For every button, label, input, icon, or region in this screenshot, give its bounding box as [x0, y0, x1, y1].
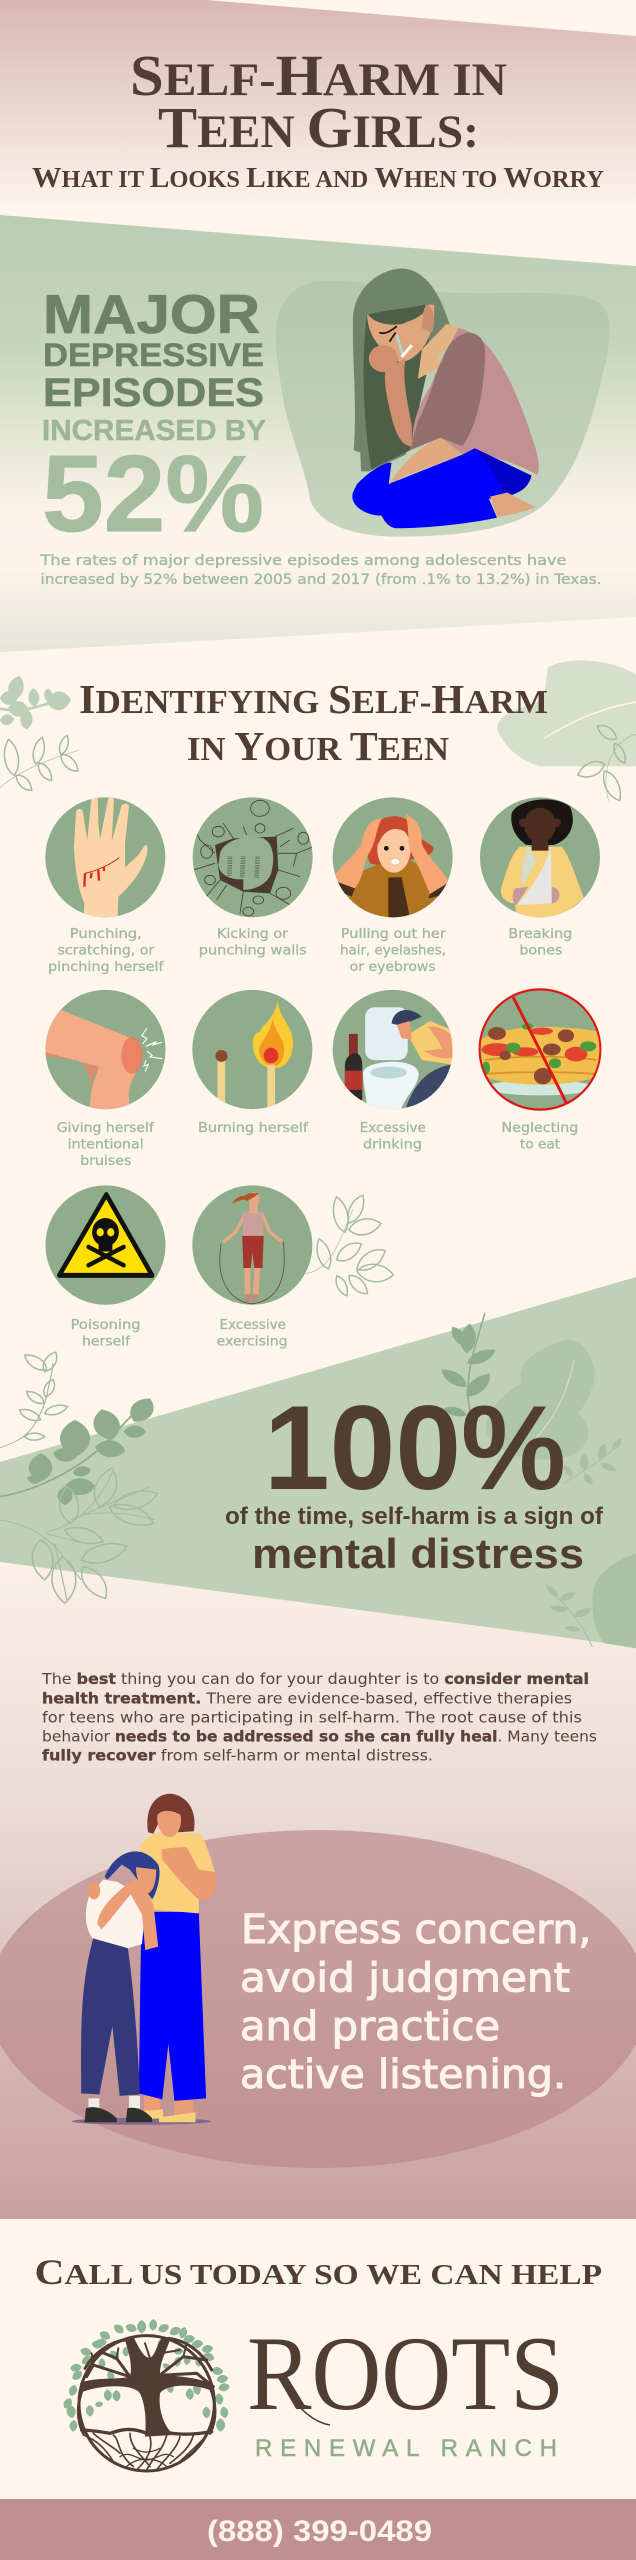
statistic headline: INCREASED BY: [42, 415, 266, 447]
labels: icon captions: Pulling out her: [341, 927, 447, 942]
leaves: around 100% band: [0, 1313, 636, 1648]
icon: bruised knee: [41, 990, 166, 1113]
heading: identifying self-harm: [79, 676, 548, 769]
footer: phone number: [0, 2499, 636, 2560]
labels: icon captions: herself: [82, 1334, 130, 1350]
paragraph: treatment advice: fully recover from self-harm or mental distress.: [42, 1747, 433, 1765]
labels: icon captions: or eyebrows: [350, 960, 436, 975]
statistic: 100% mental distress: [225, 1381, 604, 1577]
illustration: mother comforting daughter: [72, 1794, 216, 2125]
labels: icon captions: scratching, or: [58, 944, 155, 958]
labels: icon captions: Poisoning: [71, 1318, 141, 1333]
paragraph: treatment advice: The best thing you can do for your daughter is to consider mental: [41, 1670, 589, 1688]
labels: icon captions: punching walls: [199, 944, 307, 958]
statistic headline: DEPRESSIVE: [43, 337, 264, 373]
statistic headline: MAJOR: [43, 283, 260, 345]
icon: broken arm sling: [480, 797, 600, 920]
title: TEEN GIRLS:: [158, 95, 479, 160]
labels: icon captions: to eat: [520, 1138, 560, 1152]
pink gradient top band: [0, 0, 636, 212]
icon grid: signs of self-harm: [41, 796, 601, 1305]
labels: icon captions: bones: [519, 944, 563, 958]
icon: excessive drinking: [333, 990, 456, 1113]
statistic: 100% mental distress: 100%: [264, 1381, 566, 1515]
paragraph: treatment advice: health treatment. There are evidence-based, effective therapies: [42, 1689, 572, 1707]
leaves: around identifying heading: [0, 660, 636, 1298]
panel: major depressive episodes: [0, 215, 636, 652]
statistic headline: 52%: [42, 433, 264, 555]
statistic: 100% mental distress: of the time, self-harm is a sign of: [225, 1503, 604, 1530]
labels: icon captions: exercising: [217, 1334, 288, 1350]
ellipse panel: express concern: [0, 1794, 636, 2168]
statistic headline: [42, 283, 266, 555]
labels: icon captions: Excessive: [360, 1121, 426, 1136]
icon: burning match: [192, 990, 312, 1109]
callout text: [240, 1907, 592, 2098]
labels: icon captions: Excessive: [220, 1318, 286, 1333]
labels: icon captions: hair, eyelashes,: [340, 944, 446, 958]
callout text: Express concern,: [241, 1907, 592, 1953]
subtitle: WHAT IT LOOKS LIKE AND WHEN TO WORRY: [32, 162, 604, 194]
labels: icon captions: Giving herself: [57, 1121, 154, 1136]
labels: icon captions: intentional: [68, 1138, 144, 1152]
callout text: active listening.: [240, 2052, 566, 2098]
paragraph: treatment advice: [41, 1670, 597, 1765]
icon: fist through wall: [193, 797, 313, 917]
logo text: renewal ranch: RENEWAL RANCH: [255, 2435, 557, 2462]
statistic description: [39, 553, 602, 588]
labels: icon captions: drinking: [363, 1138, 422, 1152]
labels: icon captions: Kicking or: [217, 927, 289, 942]
icon: neglecting to eat: [480, 989, 601, 1110]
labels: icon captions: Burning herself: [198, 1121, 308, 1136]
statistic description: The rates of major depressive episodes among adolescents have: [39, 553, 567, 569]
logo text: roots: ROOTS: [247, 2315, 564, 2432]
pink lower background: [0, 1500, 636, 2219]
footer: phone number: (888) 399-0489: [207, 2515, 432, 2548]
icon: poison warning: [45, 1185, 166, 1305]
callout text: and practice: [240, 2004, 500, 2050]
icon: jumping rope: [192, 1185, 312, 1305]
labels: icon captions: Punching,: [70, 927, 142, 942]
illustration: crying girl: [276, 269, 610, 537]
labels: icon captions: Breaking: [508, 927, 572, 942]
heading: identifying self-harm: IN YOUR TEEN: [187, 723, 449, 769]
paragraph: treatment advice: for teens who are participating in self-harm. The root cause of this: [42, 1708, 582, 1726]
callout text: avoid judgment: [240, 1956, 570, 2002]
pink ellipse: [0, 1830, 636, 2168]
statistic: 100% mental distress: mental distress: [252, 1530, 584, 1577]
labels: icon captions: bruises: [80, 1154, 132, 1169]
panel: call to action: [0, 2219, 636, 2499]
icon: cut hand: [45, 796, 165, 923]
title: SELF-HARM IN: [130, 43, 507, 108]
icon: pulling out hair: [333, 797, 453, 918]
heading: call us today: CALL US TODAY SO WE CAN HELP: [34, 2252, 602, 2292]
green diagonal band: [0, 1277, 636, 1647]
statistic headline: EPISODES: [43, 371, 264, 415]
labels: icon captions: pinching herself: [48, 960, 164, 975]
labels: icon captions: Neglecting: [501, 1121, 578, 1136]
paragraph: treatment advice: behavior needs to be addressed so she can fully heal . Many teens: [42, 1727, 597, 1745]
logo: tree of life: [61, 2319, 230, 2471]
statistic description: increased by 52% between 2005 and 2017 (from .1% to 13.2%) in Texas.: [40, 572, 602, 588]
title: [130, 43, 507, 160]
green gradient band: [0, 215, 636, 652]
labels: icon captions: [48, 927, 578, 1350]
heading: identifying self-harm: IDENTIFYING SELF-HARM: [79, 676, 548, 722]
